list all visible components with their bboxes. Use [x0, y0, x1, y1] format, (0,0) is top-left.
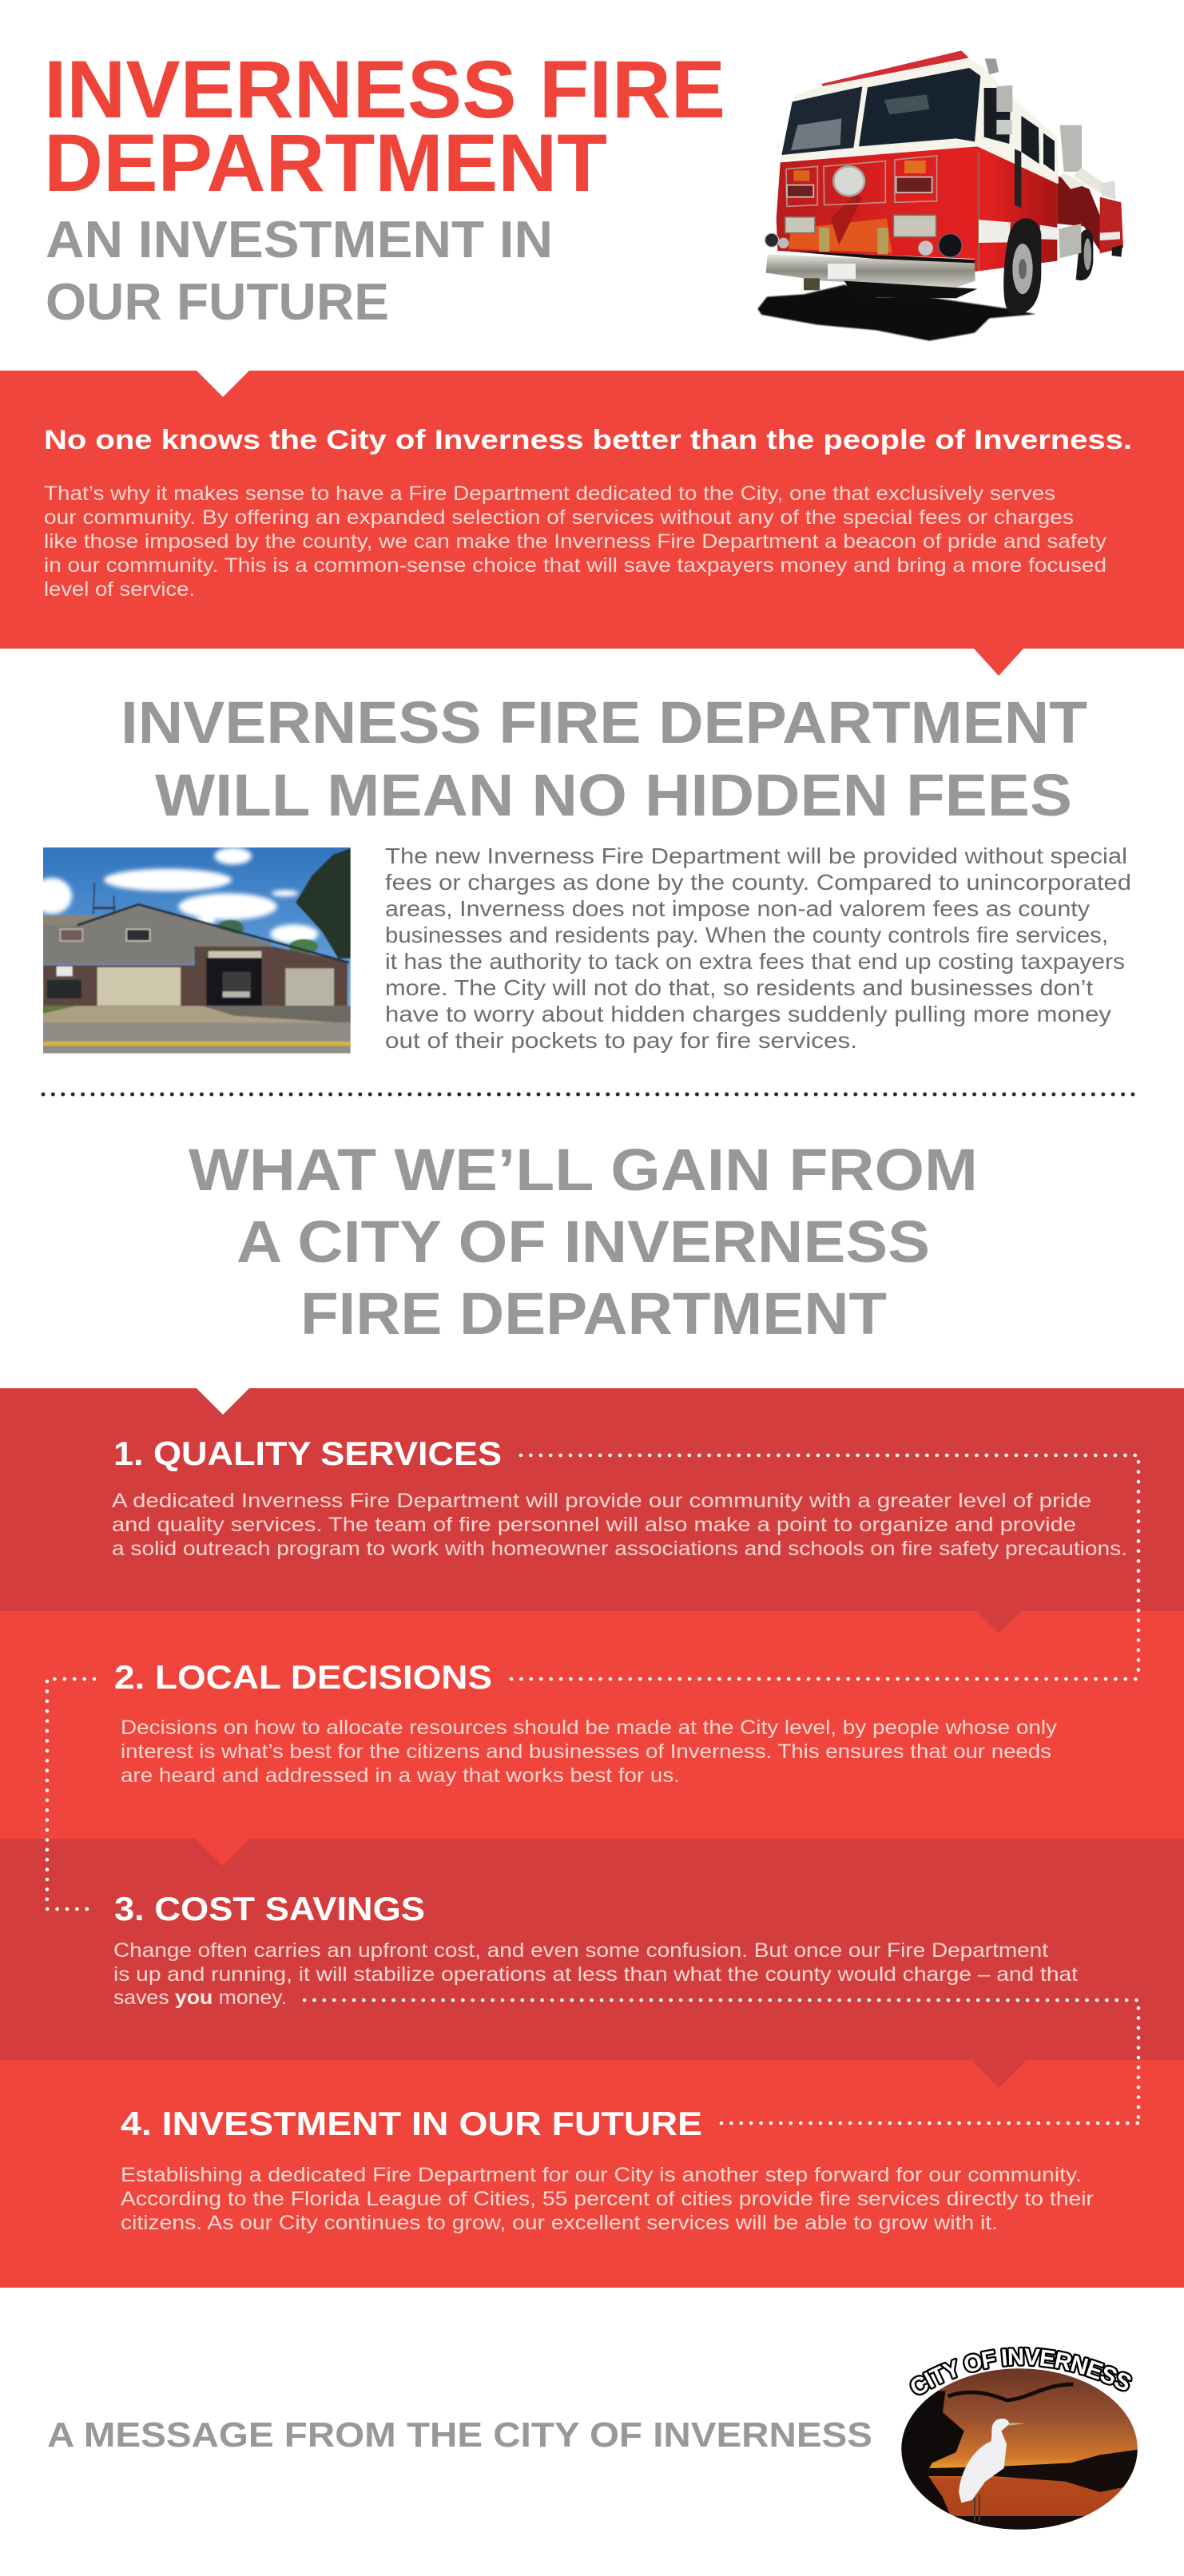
intro paragraph: our community. By offering an expanded selection of services without any of the special fees or charges: [44, 506, 1074, 529]
body text: no hidden fees: it has the authority to tack on extra fees that end up costing taxpayers: [385, 949, 1125, 974]
body: cost savings: Change often carries an upfront cost, and even some confusion. But once our Fire Department: [113, 1939, 1048, 1962]
heading: what we'll gain: A CITY OF INVERNESS: [236, 1209, 930, 1275]
heading: investment in our future: 4. INVESTMENT IN OUR FUTURE: [121, 2105, 702, 2142]
footer message: A MESSAGE FROM THE CITY OF INVERNESS: [47, 2415, 872, 2455]
intro heading: No one knows the City of Inverness better than the people of Inverness.: [44, 425, 1132, 455]
image: fire truck: [757, 50, 1123, 341]
body: local decisions: interest is what’s best for the citizens and businesses of Inverness. This ensures that our needs: [121, 1740, 1051, 1763]
notch: top: [197, 371, 249, 397]
body: local decisions: are heard and addressed in a way that works best for us.: [121, 1764, 680, 1787]
body: quality services: [112, 1490, 1127, 1560]
image: fire station photo: [32, 844, 354, 1057]
subtitle: AN INVESTMENT IN: [46, 210, 553, 268]
heading: what we'll gain: WHAT WE’LL GAIN FROM: [189, 1137, 978, 1203]
body: quality services: and quality services. The team of fire personnel will also make a point to organize and provide: [112, 1514, 1076, 1536]
title: [44, 44, 725, 208]
title: INVERNESS FIRE: [44, 44, 725, 135]
notch: section 2: [976, 1611, 1021, 1633]
body text: no hidden fees: businesses and residents pay. When the county controls fire services,: [385, 923, 1108, 947]
body text: no hidden fees: more. The City will not do that, so residents and businesses don’t: [385, 975, 1093, 1000]
intro paragraph: [44, 482, 1107, 601]
body: quality services: a solid outreach program to work with homeowner associations and schools on fire safety precautions.: [112, 1538, 1127, 1560]
body: investment in our future: Establishing a dedicated Fire Department for our City is another step forward for our community.: [121, 2164, 1082, 2186]
heading: cost savings: 3. COST SAVINGS: [114, 1890, 425, 1927]
subtitle: [46, 210, 553, 331]
body text: no hidden fees: The new Inverness Fire Department will be provided without special: [385, 843, 1127, 868]
heading: local decisions: 2. LOCAL DECISIONS: [114, 1658, 492, 1696]
heading: what we'll gain: [189, 1137, 978, 1347]
panel: intro: [0, 371, 1184, 676]
intro paragraph: level of service.: [44, 578, 195, 601]
body: cost savings: [113, 1939, 1078, 2009]
intro paragraph: like those imposed by the county, we can make the Inverness Fire Department a beacon of pride and safety: [44, 530, 1107, 553]
panel: 1. quality services: [0, 1388, 1184, 1612]
notch: section 4: [971, 2060, 1027, 2088]
panel: 2. local decisions: [0, 1611, 1184, 1840]
panel: 4. investment in our future: [0, 2060, 1184, 2288]
heading: no hidden fees: [121, 689, 1087, 828]
title: DEPARTMENT: [44, 117, 607, 208]
body: investment in our future: According to the Florida League of Cities, 55 percent of cities provide fire services directly to their: [121, 2188, 1094, 2210]
body text: no hidden fees: have to worry about hidden charges suddenly pulling more money: [385, 1002, 1111, 1026]
body: cost savings: saves you money.: [113, 1987, 287, 2009]
connector: dotted path between sections: [47, 1455, 1138, 2123]
body: local decisions: [121, 1717, 1058, 1787]
heading: no hidden fees: WILL MEAN NO HIDDEN FEES: [155, 762, 1072, 828]
intro paragraph: in our community. This is a common-sense choice that will save taxpayers money and bring a more focused: [44, 554, 1107, 577]
logo: city of inverness: [901, 2347, 1138, 2530]
notch: section 3: [195, 1839, 249, 1866]
body text: no hidden fees: fees or charges as done by the county. Compared to unincorporated: [385, 870, 1131, 895]
body: investment in our future: [121, 2164, 1094, 2234]
body: cost savings: is up and running, it will stabilize operations at less than what the county would charge – and that: [113, 1963, 1078, 1986]
subtitle: OUR FUTURE: [46, 272, 389, 331]
panel: 3. cost savings: [0, 1839, 1184, 2060]
heading: quality services: 1. QUALITY SERVICES: [113, 1435, 502, 1472]
body text: no hidden fees: out of their pockets to pay for fire services.: [385, 1028, 857, 1053]
intro paragraph: That’s why it makes sense to have a Fire Department dedicated to the City, one that exclusively serves: [44, 482, 1055, 505]
notch: bottom: [974, 649, 1023, 676]
body text: no hidden fees: areas, Inverness does not impose non-ad valorem fees as county: [385, 896, 1090, 921]
body: quality services: A dedicated Inverness Fire Department will provide our community with a greater level of pride: [112, 1490, 1091, 1512]
heading: no hidden fees: INVERNESS FIRE DEPARTMENT: [121, 689, 1087, 756]
body: local decisions: Decisions on how to allocate resources should be made at the City level, by people whose only: [121, 1717, 1058, 1739]
heading: what we'll gain: FIRE DEPARTMENT: [300, 1280, 887, 1347]
body: investment in our future: citizens. As our City continues to grow, our excellent services will be able to grow with it.: [121, 2212, 998, 2234]
body text: no hidden fees: [385, 843, 1131, 1053]
logo: city of inverness: CITY OF INVERNESS: [909, 2347, 1133, 2395]
notch: section top: [197, 1388, 249, 1415]
